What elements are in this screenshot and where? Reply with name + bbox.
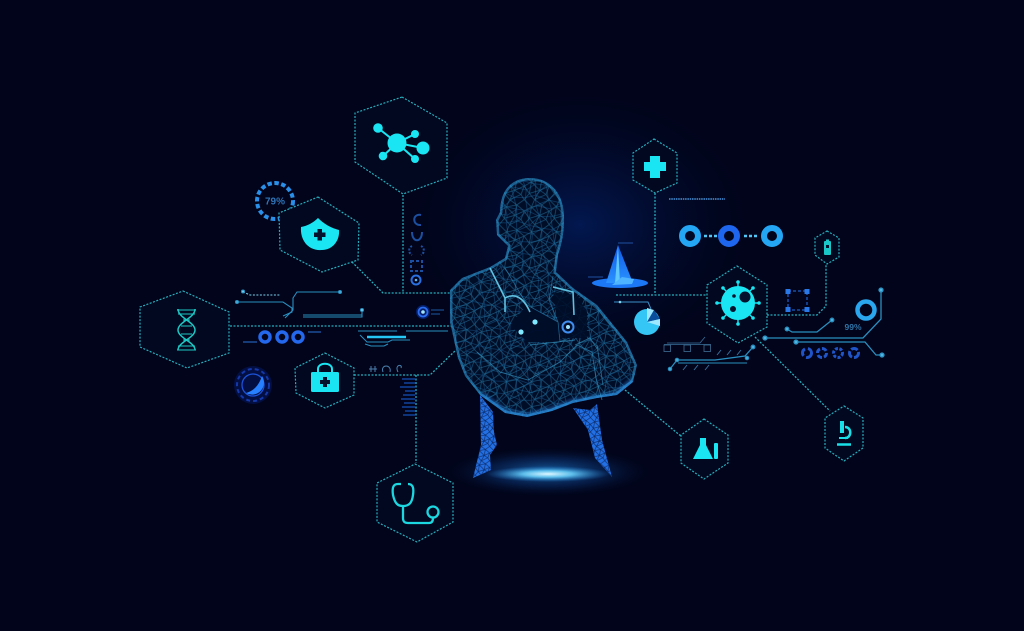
pie chart [614, 301, 660, 335]
right leg [573, 404, 612, 477]
selection square [786, 289, 810, 312]
icon: medical kit [311, 364, 339, 392]
icon: shield with cross [301, 218, 339, 250]
left leg [473, 395, 497, 478]
signal bars [400, 378, 415, 416]
circuit group: lower center [664, 337, 755, 371]
dial gauge [234, 366, 272, 404]
three donut gauges [682, 228, 780, 244]
three blue rings [243, 332, 321, 342]
progress ring 79% [257, 183, 293, 219]
hexagon: network [355, 97, 447, 194]
icon: virus [715, 280, 761, 326]
icon: eye sensor [416, 305, 444, 319]
icon: molecule network [373, 123, 430, 163]
stethoscope glowing dots [518, 319, 538, 335]
lower sleeve highlight [480, 382, 633, 417]
hexagon: medical kit [295, 353, 354, 408]
icon: stethoscope [393, 484, 438, 523]
hexagon: stethoscope [377, 464, 453, 542]
doctor figure [450, 178, 637, 478]
icon: medical plus [644, 156, 666, 178]
icon: flask and test tube [693, 438, 718, 459]
body mesh [450, 178, 637, 417]
circuit group: right [763, 288, 884, 357]
small arcs above medkit line [369, 365, 401, 372]
hexagon: shield [279, 197, 359, 272]
floor glow [440, 446, 656, 498]
ring gauge 99% [844, 302, 874, 332]
coat lapels [505, 268, 560, 342]
hexagon: plus [633, 139, 677, 193]
hexagon: battery [815, 231, 839, 264]
infographic canvas [139, 96, 885, 543]
hexagon: virus [707, 266, 767, 343]
circuit group: center left [358, 331, 448, 346]
cone chart [588, 243, 648, 288]
four small blue dials [802, 348, 858, 358]
bright edge band [450, 178, 637, 417]
progress ring 79%: 79% [265, 196, 285, 208]
vertical arc icons beside network line [409, 215, 424, 284]
dotted connector lines [230, 193, 830, 463]
ring gauge 99%: 99% [844, 322, 862, 332]
stethoscope on figure [490, 268, 574, 332]
circuit group: upper left [236, 290, 364, 318]
icon: battery [824, 240, 831, 255]
background glow [390, 75, 770, 375]
hexagon: microscope [825, 406, 863, 461]
dark chest panels [510, 305, 560, 342]
crossed arms outline [477, 338, 603, 400]
text line strip [669, 198, 725, 200]
hexagon: flask [681, 419, 728, 479]
icon: DNA helix [177, 309, 196, 350]
hexagon: DNA [140, 291, 229, 368]
icon: microscope [837, 421, 851, 444]
